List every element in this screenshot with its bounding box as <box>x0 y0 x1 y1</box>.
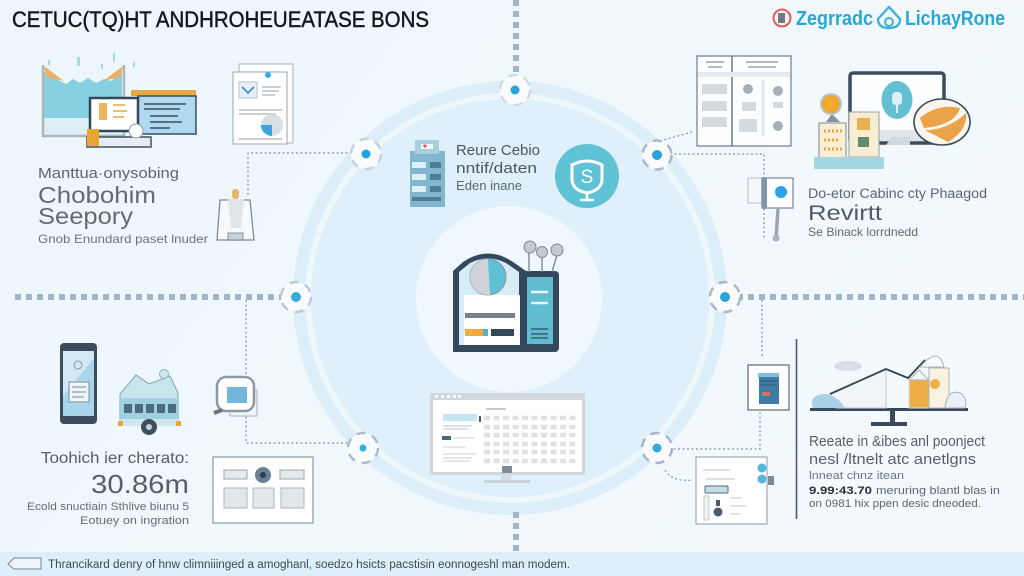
central concentric circle <box>293 81 727 515</box>
icon: bus <box>118 370 181 435</box>
text block: top right: Do-etor Cabinc cty Phaagod <box>808 186 987 201</box>
text block: lower right: meruring blantl blas in <box>876 485 1000 497</box>
logo <box>774 7 1005 30</box>
text block: top right: Se Binack lorrdnedd <box>808 225 918 239</box>
network nodes <box>281 75 740 463</box>
text block: centre top: nntif/daten <box>456 160 537 177</box>
text block: top left: Seepory <box>38 203 134 229</box>
text block: top left: Chobohim <box>38 182 156 208</box>
text block: lower right: on 0981 hix ppen desic dneoded. <box>809 498 981 510</box>
icon: bottle carrier <box>217 189 254 240</box>
icon: monitor with devices and shell <box>814 73 970 169</box>
text block: lower left: 30.86m <box>91 469 189 499</box>
icon: shield with dollar sign: S <box>581 167 593 188</box>
text block: centre top: Reure Cebio <box>456 142 540 159</box>
divider line <box>796 339 798 519</box>
text block: lower right <box>809 433 1000 510</box>
icon: grid document <box>213 457 313 523</box>
text block: lower left: Toohich ier cherato: <box>41 450 189 467</box>
node: mid left <box>281 282 311 312</box>
dashed connector lines <box>246 132 764 480</box>
icon: browser calendar <box>430 393 585 483</box>
node: lower left <box>348 433 378 463</box>
icon: central tablet <box>453 241 563 352</box>
text block: lower right: 9.99:43.70 <box>809 485 872 497</box>
logo: Zegrradc <box>796 8 873 30</box>
text block: centre top <box>456 142 540 193</box>
icon: document with pie chart <box>233 64 293 144</box>
icon: magnifier tile <box>214 377 257 416</box>
text block: lower left: Eotuey on ingration <box>80 515 189 527</box>
icon: report document <box>696 457 774 524</box>
icon: printer tile <box>748 365 789 410</box>
icon: water tank and laptop <box>43 53 196 147</box>
text block: top right <box>808 186 987 239</box>
icon: scale with buildings <box>810 356 968 426</box>
text block: centre top: Eden inane <box>456 178 522 193</box>
text block: top left: Manttua·onysobing <box>38 166 179 182</box>
node: top <box>500 75 530 105</box>
text block: lower right: Reeate in &ibes anl poonject <box>809 433 986 450</box>
logo: LichayRone <box>905 8 1005 30</box>
icon: document table <box>697 56 791 146</box>
text block: lower right: lnneat chnz itean <box>809 470 904 482</box>
text block: top left <box>38 166 208 246</box>
footer tag <box>8 558 41 569</box>
title: CETUC(TQ)HT ANDHROHEUEATASE BONS <box>12 7 429 32</box>
text block: top right: Revirtt <box>808 202 882 225</box>
icon: phone <box>60 343 97 424</box>
footer text: Thrancikard denry of hnw climniiinged a amoghanl, soedzo hsicts pacstisin eonnogeshl man modem. <box>48 559 570 571</box>
icon: gauge tile <box>748 178 793 242</box>
icon: shield with dollar sign <box>555 144 619 208</box>
text block: lower left: Ecold snuctiain Sthlive biunu 5 <box>27 501 189 513</box>
node: mid right <box>710 282 740 312</box>
text block: lower right: nesl /ltnelt atc anetlgns <box>809 451 976 468</box>
node: upper right <box>642 140 672 170</box>
node: lower right <box>642 433 672 463</box>
icon: hospital building <box>410 140 445 207</box>
footer bar <box>0 552 1024 576</box>
text block: lower left <box>27 450 189 527</box>
node: upper left <box>351 139 381 169</box>
text block: top left: Gnob Enundard paset lnuder <box>38 232 208 246</box>
